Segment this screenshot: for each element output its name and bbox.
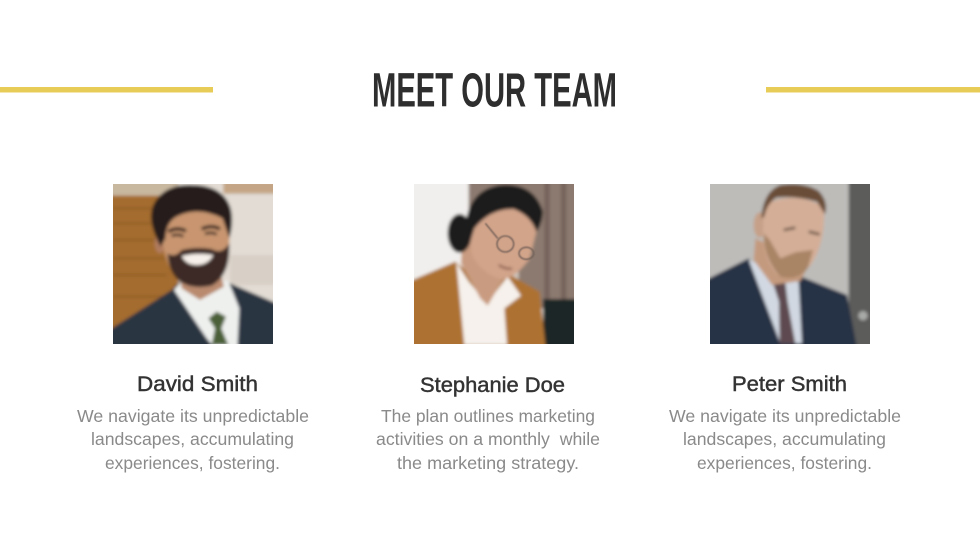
description: David Smith: landscapes, accumulating (91, 429, 294, 449)
description: Stephanie Doe: activities on a monthly while (376, 429, 600, 449)
description: Peter Smith (669, 406, 901, 473)
description: Stephanie Doe: the marketing strategy. (397, 453, 579, 473)
description: Stephanie Doe: The plan outlines marketing (381, 406, 595, 426)
panel: Peter Smith (669, 175, 901, 473)
photo: Stephanie Doe (414, 184, 574, 344)
photo: Peter Smith (710, 184, 870, 344)
title: MEET OUR TEAM (372, 64, 617, 118)
photo: David Smith (113, 184, 273, 344)
description: Peter Smith: experiences, fostering. (697, 453, 872, 473)
panel: Stephanie Doe (376, 175, 600, 473)
description: Peter Smith: landscapes, accumulating (683, 429, 886, 449)
right accent bar (766, 87, 980, 92)
panel: David Smith (77, 175, 309, 473)
description: David Smith: We navigate its unpredictable (77, 406, 309, 426)
left accent bar (0, 87, 213, 92)
description: Peter Smith: We navigate its unpredictable (669, 406, 901, 426)
description: David Smith: experiences, fostering. (105, 453, 280, 473)
description: Stephanie Doe (376, 406, 600, 473)
name: Peter Smith: Peter Smith (732, 373, 847, 396)
name: David Smith: David Smith (137, 373, 258, 396)
description: David Smith (77, 406, 309, 473)
name: Stephanie Doe: Stephanie Doe (420, 374, 565, 397)
